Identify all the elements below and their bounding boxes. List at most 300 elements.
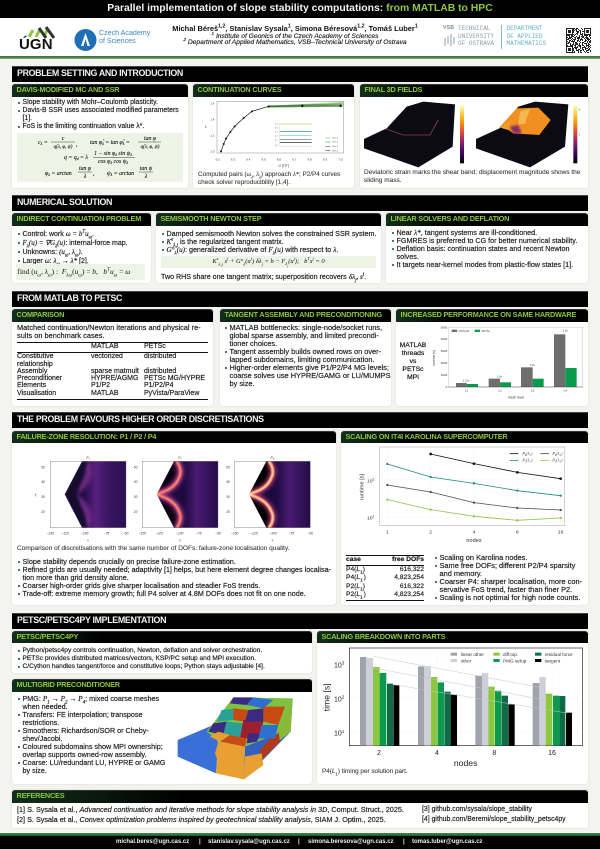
equation box: ψ bbox=[107, 171, 111, 177]
bullet list: Damped semismooth Newton solves the constrained SSR system. bbox=[166, 230, 376, 238]
line chart: continuation curves: 6.7 bbox=[292, 158, 296, 162]
heatmaps: P1 P2 P4: −125 bbox=[251, 531, 258, 535]
authors and affiliations: 1 Institute of Geonics of the Czech Academy of Sciences bbox=[211, 30, 379, 40]
side label: threads bbox=[402, 350, 424, 357]
vsb name: UNIVERSITY bbox=[458, 33, 494, 40]
bullet list: Scaling is not optimal for high node counts. bbox=[440, 593, 580, 602]
equation box: q = q bbox=[64, 155, 77, 161]
line chart: continuation curves: 1.0 bbox=[210, 150, 214, 154]
bullet list bbox=[162, 230, 376, 257]
equation box: = bbox=[124, 140, 130, 146]
bar chart: runtime by mesh level: 1.8x bbox=[497, 375, 503, 379]
email 4: tomas.luber@ugn.cas.cz bbox=[412, 839, 483, 845]
bar chart: time by part: 2 bbox=[377, 750, 381, 757]
line chart: continuation curves: 0.4 bbox=[275, 136, 278, 138]
line chart: continuation curves: ω [10⁷] bbox=[278, 164, 289, 168]
3D mesh subdomains bbox=[178, 697, 293, 780]
section heading: numerical solution bbox=[12, 195, 588, 211]
email 2: stanislav.sysala@ugn.cas.cz bbox=[208, 839, 290, 845]
bullet list: FGMRES is preferred to CG for better numerical stability. bbox=[396, 237, 577, 245]
equation box bbox=[16, 264, 145, 280]
panel heading: CONTINUATION CURVES bbox=[198, 85, 281, 94]
bullet list bbox=[18, 694, 166, 775]
panel heading bbox=[193, 84, 354, 97]
logo: Czech Academy of Sciences bbox=[74, 29, 150, 51]
bar chart: runtime by mesh level: 5000 bbox=[441, 326, 448, 330]
heatmaps: P1 P2 P4: −150 bbox=[47, 531, 55, 535]
panel: continuation curves bbox=[193, 84, 354, 188]
heatmaps: P1 P2 P4: −50 bbox=[123, 531, 129, 535]
line chart: continuation curves: 6.5 bbox=[261, 158, 266, 162]
panel heading bbox=[220, 309, 391, 322]
equation box: λ bbox=[144, 174, 148, 180]
logo mark: peaks bbox=[28, 26, 56, 39]
heatmaps: P1 P2 P4: 50 bbox=[134, 465, 138, 469]
line chart: continuation curves: Run 2 bbox=[332, 142, 339, 144]
heatmaps: P1 P2 P4: x bbox=[178, 538, 181, 542]
bar chart: time by part: 8 bbox=[492, 750, 496, 757]
panel heading: SCALING BREAKDOWN INTO PARTS bbox=[322, 632, 445, 641]
DOF table: 4,823,254 bbox=[394, 590, 424, 598]
side label: MPI bbox=[407, 374, 419, 381]
equation box: c bbox=[38, 140, 41, 146]
bar chart: time by part: 2 bbox=[342, 695, 345, 700]
equation box: cos φ bbox=[98, 159, 110, 165]
department name: MATHEMATICS bbox=[506, 40, 546, 47]
line chart: continuation curves: 6.8 bbox=[307, 158, 312, 162]
bullet list: Higher-order elements give P1/P2/P4 MG levels; bbox=[230, 363, 389, 372]
bullet list: Deflation basis: continuation states and recent Newton bbox=[396, 245, 570, 253]
bullet list: Python/petsc4py controls continuation, Newton, deflation and solver orchestration. bbox=[22, 647, 262, 654]
bar chart: runtime by mesh level: mesh level bbox=[508, 396, 524, 400]
caption: Computed pairs (ωλ, λλ) approach λ*; P2/P4 curves bbox=[198, 171, 340, 179]
heatmaps: P1 P2 P4: 30 bbox=[226, 495, 230, 499]
heatmaps: P1 P2 P4: −50 bbox=[308, 531, 314, 535]
equation box: 1 − sin φ bbox=[94, 151, 115, 157]
bar chart: runtime by mesh level: runtime [s] bbox=[432, 350, 436, 366]
bullet list: FoS is the limiting continuation value λ*. bbox=[22, 123, 144, 130]
bullet list: Coarser P4: sharper localisation, more con- bbox=[440, 577, 582, 586]
equation box: = arctan bbox=[50, 171, 72, 177]
heatmaps: P1 P2 P4: 40 bbox=[41, 480, 45, 484]
panel heading: DAVIS-MODIFIED MC AND SSR bbox=[16, 85, 119, 94]
bullet list bbox=[392, 229, 577, 269]
heatmaps: P1 P2 P4: 40 bbox=[226, 480, 230, 484]
heatmaps: P1 P2 P4: P₁ bbox=[87, 456, 90, 460]
heatmaps: P1 P2 P4: 20 bbox=[133, 510, 138, 514]
panel heading: COMPARISON bbox=[16, 310, 64, 319]
equation box: tan ψ bbox=[140, 166, 153, 172]
bar chart: runtime by mesh level: 2.8x bbox=[563, 329, 569, 333]
bullet list: shev/Jacobi. bbox=[22, 734, 62, 743]
bar chart: runtime by mesh level: MATLAB bbox=[459, 329, 469, 333]
3D field renders bbox=[364, 102, 581, 168]
bullet list: Trade-off: extreme memory growth; full P4 solver at 4.8M DOFs does not fit on one node. bbox=[22, 589, 306, 598]
vsb name: TECHNICAL bbox=[458, 25, 490, 32]
email 3: simona.beresova@ugn.cas.cz bbox=[308, 839, 394, 845]
section heading: problem setting: PROBLEM SETTING AND INTRODUCTION bbox=[17, 68, 183, 78]
DOF table: P4(L1) bbox=[346, 566, 365, 574]
line chart: runtime vs nodes: 16 bbox=[558, 530, 564, 536]
panel heading: FINAL 3D FIELDS bbox=[364, 85, 422, 94]
DOF table: P4(L1′) bbox=[346, 572, 366, 582]
equation box: c bbox=[62, 136, 65, 142]
3D field renders: 2 bbox=[579, 133, 581, 137]
panel heading bbox=[12, 631, 312, 643]
intro text: Matched continuation/Newton iterations and physical re- bbox=[17, 323, 201, 332]
equation box: sin ψ bbox=[117, 151, 131, 157]
panel heading bbox=[12, 84, 188, 97]
bullet list: Tangent assembly builds owned rows on over- bbox=[230, 347, 381, 356]
bullet list bbox=[225, 323, 390, 388]
panel heading: TANGENT ASSEMBLY AND PRECONDITIONING bbox=[224, 310, 382, 319]
line chart: continuation curves: Run 1 bbox=[332, 138, 339, 140]
comparison table: P1/P2/P4 bbox=[144, 382, 174, 389]
caption bbox=[198, 171, 340, 186]
bullet list: PETSc provides distributed matrices/vectors, KSP/PC setup and MPI execution. bbox=[22, 655, 256, 662]
comparison table: HYPRE/AGMG bbox=[91, 375, 138, 382]
side label: vs bbox=[410, 358, 416, 365]
bar chart: time by part: tangent bbox=[545, 659, 561, 664]
equation box: d bbox=[77, 156, 80, 161]
bullet list: overlap supports owned-row assembly. bbox=[22, 750, 147, 759]
separator: | bbox=[403, 839, 405, 845]
line chart: continuation curves: 1.6 bbox=[210, 102, 214, 106]
bar chart: runtime by mesh level: 4000 bbox=[441, 337, 448, 341]
equation box: q(λ, φ, ψ) bbox=[141, 145, 160, 150]
section heading: PETSc/petsc4py implementation: PETSC/PETSC4PY IMPLEMENTATION bbox=[17, 615, 166, 625]
panel heading bbox=[12, 309, 213, 322]
equation box: λ bbox=[40, 141, 43, 146]
closing note: Two RHS share one tangent matrix; superposition recovers δλj, sj. bbox=[161, 273, 366, 283]
bullet list: Unknowns: (uω, λω). bbox=[22, 248, 83, 258]
equation box bbox=[17, 133, 183, 182]
line chart: runtime vs nodes: 2 bbox=[373, 515, 375, 519]
equation box: q(λ, φ, ψ) bbox=[54, 145, 73, 150]
logo: VSB Technical University of Ostrava bbox=[443, 25, 494, 47]
panel heading bbox=[317, 631, 588, 643]
panel: multigrid preconditioner bbox=[12, 679, 312, 784]
line chart: continuation curves: 6.3 bbox=[231, 158, 235, 162]
bullet list: Larger ω: λω → λ* [2]. bbox=[22, 257, 89, 267]
equation box: λ bbox=[114, 152, 117, 157]
line chart: continuation curves: 0.8 bbox=[275, 128, 278, 130]
panel heading bbox=[341, 431, 588, 443]
bar chart: time by part: 10 bbox=[334, 663, 342, 670]
panel heading: LINEAR SOLVERS AND DEFLATION bbox=[390, 214, 509, 223]
bar chart: runtime by mesh level: L3 bbox=[531, 389, 535, 393]
panel: final 3D fields bbox=[360, 84, 588, 188]
bar chart: time by part: residual force bbox=[545, 652, 573, 657]
equation box: λ bbox=[122, 141, 125, 146]
intro text: sults on benchmark cases. bbox=[17, 331, 104, 340]
top title bar bbox=[0, 0, 600, 18]
equation box: find (uω, λω) : Fλω(uω) = b, bTuω = ω bbox=[18, 267, 130, 278]
3D field renders: – bbox=[465, 133, 467, 137]
intro text bbox=[17, 323, 201, 340]
DOF table: 616,322 bbox=[400, 582, 424, 590]
panel: Davis-modified MC and SSR bbox=[12, 84, 188, 188]
panel: comparison bbox=[12, 309, 213, 406]
panel heading: FAILURE-ZONE RESOLUTION: P1 / P2 / P4 bbox=[16, 432, 156, 441]
bar chart: time by part: PMG setup bbox=[503, 659, 527, 664]
bar chart: runtime by mesh level: 1.27x bbox=[463, 379, 470, 383]
reference list left: [2] S. Sysala et al., Convex optimization problems inspired by geotechnical stability analysis, SIAM J. Optim., 2025. bbox=[17, 815, 386, 824]
comparison table: MATLAB bbox=[91, 390, 118, 397]
panel: semismooth Newton step bbox=[156, 213, 381, 283]
line chart: runtime vs nodes: P₄(L₁) bbox=[522, 451, 533, 456]
panel: scaling on IT4I Karolina bbox=[341, 431, 588, 605]
caption bbox=[364, 169, 580, 184]
heatmaps: P1 P2 P4: P₂ bbox=[179, 456, 183, 460]
bar chart: time by part: nodes bbox=[454, 758, 478, 768]
equation box: = arctan bbox=[112, 171, 134, 177]
bar chart: runtime by mesh level: 0 bbox=[446, 385, 448, 389]
bullet list: tioner choices. bbox=[230, 339, 277, 348]
heatmaps: P1 P2 P4: 40 bbox=[134, 480, 138, 484]
comparison table: relationship bbox=[17, 361, 53, 368]
bullet list bbox=[18, 228, 128, 267]
academy name: Czech Academy bbox=[99, 29, 150, 37]
bullet list: Smoothers: Richardson/SOR or Cheby- bbox=[22, 726, 149, 735]
equation box: = bbox=[42, 140, 48, 146]
line chart: continuation curves: λ bbox=[204, 125, 206, 129]
side label: MATLAB bbox=[400, 342, 426, 349]
bar chart: time by part: linear other bbox=[461, 652, 484, 657]
authors and affiliations: Michal Béreš1,2, Stanislav Sysala1, Simona Béresová1,2, Tomáš Luber1 bbox=[172, 24, 418, 33]
heatmaps: P1 P2 P4: 20 bbox=[40, 510, 45, 514]
bullet list: MATLAB bottlenecks: single-node/socket runs, bbox=[230, 323, 382, 332]
bullet list: G°λ(u): generalized derivative of Fλ(u) with respect to λ. bbox=[166, 246, 338, 257]
heatmaps: P1 P2 P4: −75 bbox=[289, 531, 295, 535]
equation box: λ bbox=[110, 172, 113, 177]
line chart: continuation curves: 6.2 bbox=[215, 158, 220, 162]
panel heading bbox=[12, 679, 312, 692]
academy emblem bbox=[74, 29, 96, 51]
bullet list: Same free DOFs; different P2/P4 sparsity bbox=[440, 561, 575, 570]
panel: PETSc/petsc4py bbox=[12, 631, 312, 673]
line chart: runtime vs nodes: runtime [s] bbox=[360, 474, 366, 501]
bullet list bbox=[18, 557, 331, 598]
equation box: λ bbox=[109, 160, 112, 165]
bullet list: Coloured subdomains show MPI ownership; bbox=[22, 742, 163, 751]
equation box: tan φ bbox=[79, 166, 92, 172]
bar chart: runtime by mesh level: 2000 bbox=[441, 361, 448, 365]
bar chart: runtime by mesh level bbox=[432, 326, 583, 400]
bar chart: runtime by mesh level: L2 bbox=[498, 389, 502, 393]
department name bbox=[501, 25, 551, 49]
panel: tangent assembly and preconditioning bbox=[220, 309, 391, 406]
reference list right bbox=[422, 805, 566, 823]
equation box: λ bbox=[101, 141, 104, 146]
comparison table: Preconditioner bbox=[17, 375, 62, 382]
heatmaps: P1 P2 P4: x bbox=[271, 538, 274, 542]
bullet list: Transfers: FE interpolation; transpose bbox=[22, 710, 142, 719]
comparison table: PyVista/ParaView bbox=[144, 390, 199, 397]
heatmaps: P1 P2 P4: x bbox=[86, 538, 89, 542]
panel heading: INDIRECT CONTINUATION PROBLEM bbox=[16, 214, 141, 223]
department name: OF APPLIED bbox=[506, 33, 543, 40]
bullet list bbox=[18, 647, 265, 670]
3D field renders: · bbox=[465, 108, 466, 110]
heatmaps: P1 P2 P4: 30 bbox=[41, 495, 45, 499]
bar chart: time by part: 1 bbox=[342, 729, 345, 734]
heatmaps: P1 P2 P4: −150 bbox=[139, 531, 147, 535]
line chart: runtime vs nodes: 8 bbox=[516, 530, 519, 536]
section heading: PETSc/petsc4py implementation bbox=[12, 613, 588, 629]
logo text: UGN: ÚGN bbox=[19, 36, 53, 53]
bullet list: PMG: P1 → P2 → P4; mixed coarse meshes bbox=[22, 694, 159, 705]
comparison table: Constitutive bbox=[17, 353, 54, 360]
panel heading bbox=[360, 84, 588, 97]
bullet list: global sparse assembly, and limited precondi- bbox=[230, 331, 379, 340]
heatmaps: P1 P2 P4: −75 bbox=[104, 531, 110, 535]
separator: | bbox=[199, 839, 201, 845]
line chart: continuation curves: Run 3 bbox=[332, 146, 339, 148]
DOF table: P2(L1′) bbox=[346, 588, 366, 599]
email 1: michal.beres@ugn.cas.cz bbox=[116, 839, 189, 845]
section heading: problem setting bbox=[12, 66, 588, 82]
caption: sliding mass. bbox=[364, 177, 402, 184]
heatmaps: P1 P2 P4 bbox=[34, 456, 314, 542]
equation box: , bbox=[93, 171, 95, 177]
bar chart: runtime by mesh level: L4 bbox=[564, 389, 567, 393]
3D field renders: 4 bbox=[579, 107, 581, 111]
bullet list: Coarser high-order grids give sharper localisation and steadier FoS trends. bbox=[22, 581, 260, 590]
bullet list: Davis-B SSR uses associated modified parameters bbox=[22, 107, 179, 114]
line chart: continuation curves: 1.4 bbox=[210, 118, 214, 122]
authors and affiliations: 2 Department of Applied Mathematics, VSB–Technical University of Ostrava bbox=[183, 37, 407, 47]
line chart: continuation curves: 6.6 bbox=[277, 158, 281, 162]
footer contact bar bbox=[0, 836, 600, 849]
equation box: λ bbox=[83, 174, 87, 180]
comparison table: Assembly bbox=[17, 368, 47, 375]
bullet list bbox=[18, 98, 179, 130]
comparison table: MATLAB bbox=[91, 343, 118, 350]
equation box: Kε λ,j sj + G°λ(uj) δλj = b − Fλj(uj); bTsj = 0 bbox=[212, 256, 325, 268]
bullet list: Kε λ,j is the regularized tangent matrix. bbox=[166, 238, 284, 248]
logo: UGN bbox=[19, 26, 56, 53]
DOF table: free DOFs bbox=[392, 556, 424, 563]
line chart: runtime vs nodes: 3 bbox=[373, 478, 375, 482]
heatmaps: P1 P2 P4: 50 bbox=[226, 465, 230, 469]
header green divider bbox=[0, 56, 600, 59]
separator: | bbox=[298, 839, 300, 845]
panel heading: INCREASED PERFORMANCE ON SAME HARDWARE bbox=[400, 310, 576, 319]
reference list left bbox=[17, 805, 404, 824]
DOF table: 4,823,254 bbox=[394, 574, 424, 581]
bar chart: runtime by mesh level: 2.3x bbox=[530, 363, 536, 367]
bullet list: [1]. bbox=[22, 115, 32, 122]
panel heading bbox=[156, 213, 381, 226]
line chart: continuation curves bbox=[204, 101, 344, 168]
line chart: runtime vs nodes: 10 bbox=[367, 479, 373, 485]
caption: Comparison of discretisations with the same number of DOFs: failure-zone localisation quality. bbox=[17, 545, 289, 552]
panel: linear solvers and deflation bbox=[386, 213, 588, 283]
vsb mark: VSB bbox=[443, 25, 454, 31]
section heading: higher order discretisations bbox=[12, 412, 588, 428]
top title bar: Parallel implementation of slope stability computations: from MATLAB to HPC bbox=[107, 3, 493, 14]
bullet list: Coarse: LU/redundant LU, HYPRE or GAMG bbox=[22, 758, 166, 767]
panel: references bbox=[12, 790, 588, 828]
section heading: higher order discretisations: THE PROBLEM FAVOURS HIGHER ORDER DISCRETISATIONS bbox=[17, 414, 264, 424]
DOF table: case bbox=[346, 556, 361, 563]
comparison table: distributed bbox=[144, 353, 176, 360]
reference list right: [3] github.com/sysala/slope_stability bbox=[422, 806, 532, 813]
DOF table: P2(L1) bbox=[346, 582, 365, 591]
line chart: continuation curves: 0.0 bbox=[275, 145, 278, 147]
bullet list: Scaling on Karolina nodes. bbox=[440, 553, 527, 562]
line chart: runtime vs nodes: 2 bbox=[430, 530, 433, 536]
bullet list: by size. bbox=[230, 379, 255, 388]
bullet list: and memory. bbox=[440, 569, 482, 578]
comparison table: P1/P2 bbox=[91, 382, 110, 389]
bar chart: time by part: diff.top. bbox=[503, 652, 518, 657]
side label bbox=[400, 342, 426, 381]
comparison table: PETSc MG/HYPRE bbox=[144, 375, 205, 382]
bar chart: time by part: other bbox=[461, 659, 472, 664]
equation box: = λ bbox=[79, 155, 88, 161]
bullet list: Slope stability depends crucially on precise failure-zone estimation. bbox=[22, 557, 236, 566]
vsb name: OF OSTRAVA bbox=[458, 40, 494, 47]
bar chart: time by part: 10 bbox=[334, 697, 342, 704]
panel heading bbox=[12, 431, 336, 443]
academy name: of Sciences bbox=[99, 37, 136, 45]
line chart: runtime vs nodes: 4 bbox=[473, 530, 476, 536]
vsb name bbox=[458, 25, 494, 47]
bullet list: Control: work ω = bTuω. bbox=[22, 230, 94, 240]
heatmaps: P1 P2 P4: −100 bbox=[81, 531, 89, 535]
bar chart: time by part: 3 bbox=[342, 661, 345, 666]
academy name bbox=[99, 29, 150, 45]
heatmaps: P1 P2 P4: 20 bbox=[225, 510, 230, 514]
heatmaps: P1 P2 P4: −50 bbox=[215, 531, 221, 535]
section heading: numerical solution: NUMERICAL SOLUTION bbox=[17, 197, 112, 207]
panel: scaling breakdown into parts bbox=[317, 631, 588, 784]
caption: Deviatoric strain marks the shear band; displacement magnitude shows the bbox=[364, 169, 580, 176]
bullet list: lapped subdomains, limiting communication. bbox=[230, 355, 375, 364]
panel: increased performance on same hardware bbox=[396, 309, 588, 406]
comparison table: Visualisation bbox=[17, 390, 56, 397]
panel heading: SCALING ON IT4I KAROLINA SUPERCOMPUTER bbox=[346, 432, 508, 441]
heatmaps: P1 P2 P4: y bbox=[34, 492, 37, 496]
line chart: continuation curves: 1.2 bbox=[210, 134, 214, 138]
equation box: , bbox=[76, 142, 78, 148]
line chart: continuation curves: 6.4 bbox=[246, 158, 250, 162]
panel heading bbox=[396, 309, 588, 322]
panel heading bbox=[12, 213, 151, 226]
line chart: continuation curves: 6.9 bbox=[323, 158, 327, 162]
DOF table bbox=[346, 555, 424, 601]
bullet list: C/Cython handles tangent/force and constitutive loops; Python stays adjustable [4]. bbox=[22, 663, 265, 670]
comparison table: Elements bbox=[17, 382, 46, 389]
bullet list: Slope stability with Mohr–Coulomb plasticity. bbox=[22, 99, 158, 106]
bullet list: tion more than grid density alone. bbox=[22, 573, 129, 582]
bullet list: solves. bbox=[396, 253, 419, 261]
bullet list: by size. bbox=[22, 766, 47, 775]
panel heading: REFERENCES bbox=[16, 791, 64, 800]
line chart: continuation curves: 0.6 bbox=[275, 132, 278, 134]
bar chart: time by part: 4 bbox=[435, 750, 439, 757]
line chart: continuation curves: Run 4 bbox=[332, 151, 339, 153]
equation box: φ bbox=[45, 171, 48, 177]
bar chart: runtime by mesh level: 3000 bbox=[441, 349, 448, 353]
line chart: runtime vs nodes: P₂(L₁) bbox=[522, 458, 533, 463]
comparison table: sparse matmult bbox=[91, 368, 139, 375]
vsb bars bbox=[444, 34, 454, 46]
panel heading bbox=[386, 213, 588, 226]
bar chart: runtime by mesh level: PETSc bbox=[482, 329, 491, 333]
